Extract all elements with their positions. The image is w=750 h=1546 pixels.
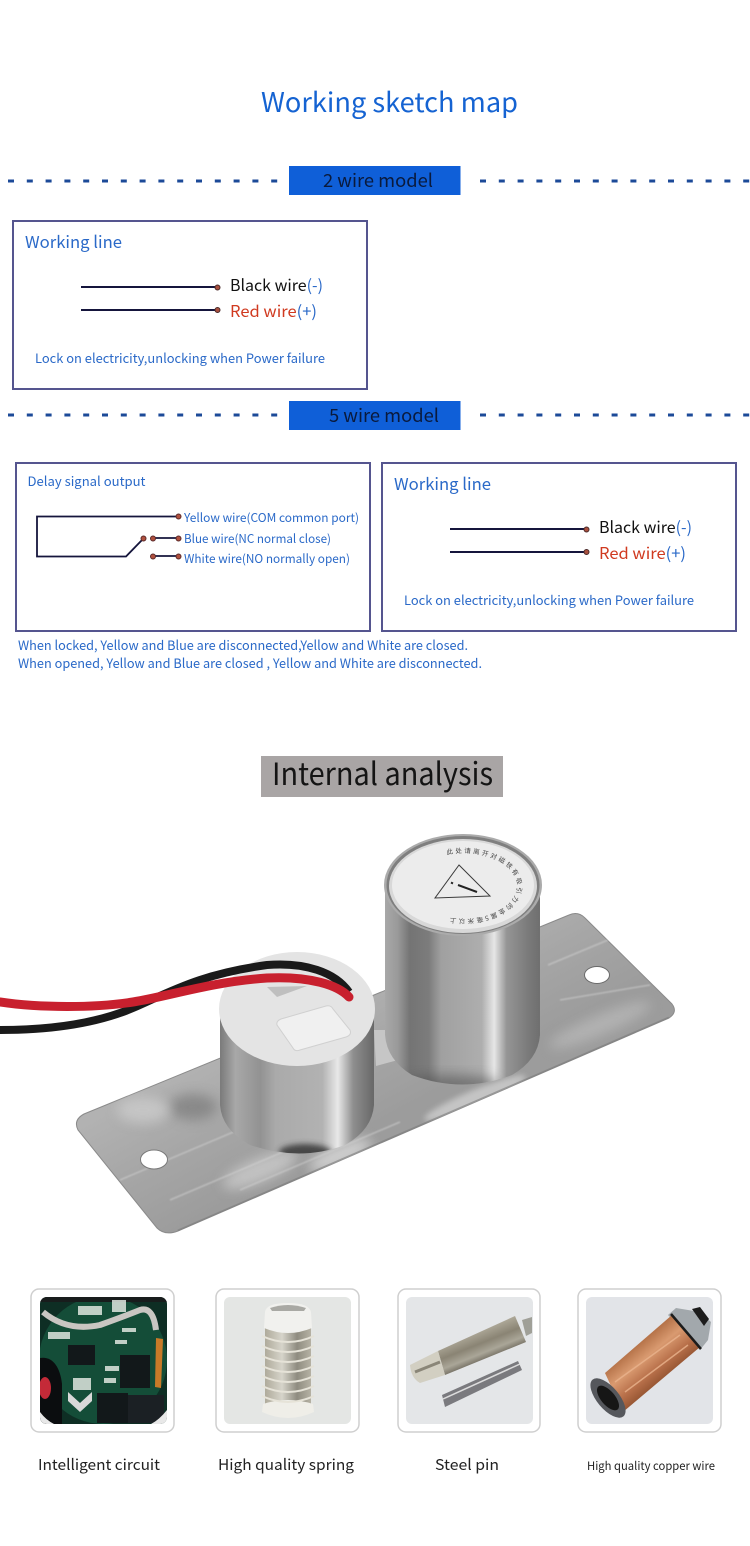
explanation text [18,635,482,672]
black wire [0,964,349,1030]
caption: spring: High quality spring [218,1454,355,1475]
label: white wire: White wire(NO normally open) [184,550,350,567]
caption: copper wire: High quality copper wire [587,1458,715,1474]
label: yellow wire: Yellow wire(COM common port) [183,509,359,526]
panel: 2 wire working line [13,221,367,389]
caption: intelligent circuit: Intelligent circuit [38,1454,160,1475]
wire diagram [81,285,220,312]
tall cylinder [374,834,542,1084]
mounting plate [76,914,674,1233]
section header: 2 wire model [8,166,750,195]
switch circuit diagram [37,514,181,559]
card: copper wire [578,1289,721,1432]
section header: 5 wire model: 5 wire model [329,402,439,428]
section header: 5 wire model [8,401,750,430]
short cylinder with white cap [219,952,375,1160]
warning triangle icon [435,865,490,898]
label: blue wire: Blue wire(NC normal close) [184,530,331,547]
product photo: electric bolt lock [0,834,675,1234]
circuit board photo [39,1296,167,1424]
panel: delay signal output [16,463,370,631]
red wire [0,978,349,1006]
card: intelligent circuit [31,1289,174,1432]
card: steel pin [398,1289,540,1432]
wire diagram [450,527,589,554]
heading: delay signal output: Delay signal output [28,471,146,490]
label: black wire: Black wire(-) [230,272,323,296]
section header: 2 wire model: 2 wire model [323,167,433,193]
copper coil photo [584,1307,711,1423]
label: black wire: Black wire(-) [599,514,692,538]
note: Lock on electricity,unlocking when Power failure [35,348,325,367]
explanation text: When opened, Yellow and Blue are closed , Yellow and White are disconnected. [18,653,482,672]
title: Working sketch map [261,81,518,120]
panel: 5 wire working line [382,463,736,631]
heading: working line: Working line [394,471,491,495]
cap recess [267,986,307,997]
face inscription: 此处请离开对磁铁有吸引力的金属5毫米以上 [447,848,522,924]
cap tab [277,1006,350,1051]
label: red wire: Red wire(+) [230,298,317,322]
heading: working line: Working line [25,229,122,253]
explanation text: When locked, Yellow and Blue are disconnected,Yellow and White are closed. [18,635,468,654]
card: spring [216,1289,359,1432]
heading: internal analysis: Internal analysis [272,749,493,794]
spring photo [262,1303,314,1418]
caption: steel pin: Steel pin [435,1454,499,1475]
steel pin photo [410,1316,532,1407]
label: red wire: Red wire(+) [599,540,686,564]
weld at cylinder base [374,1030,398,1066]
note: Lock on electricity,unlocking when Power failure [404,590,694,609]
